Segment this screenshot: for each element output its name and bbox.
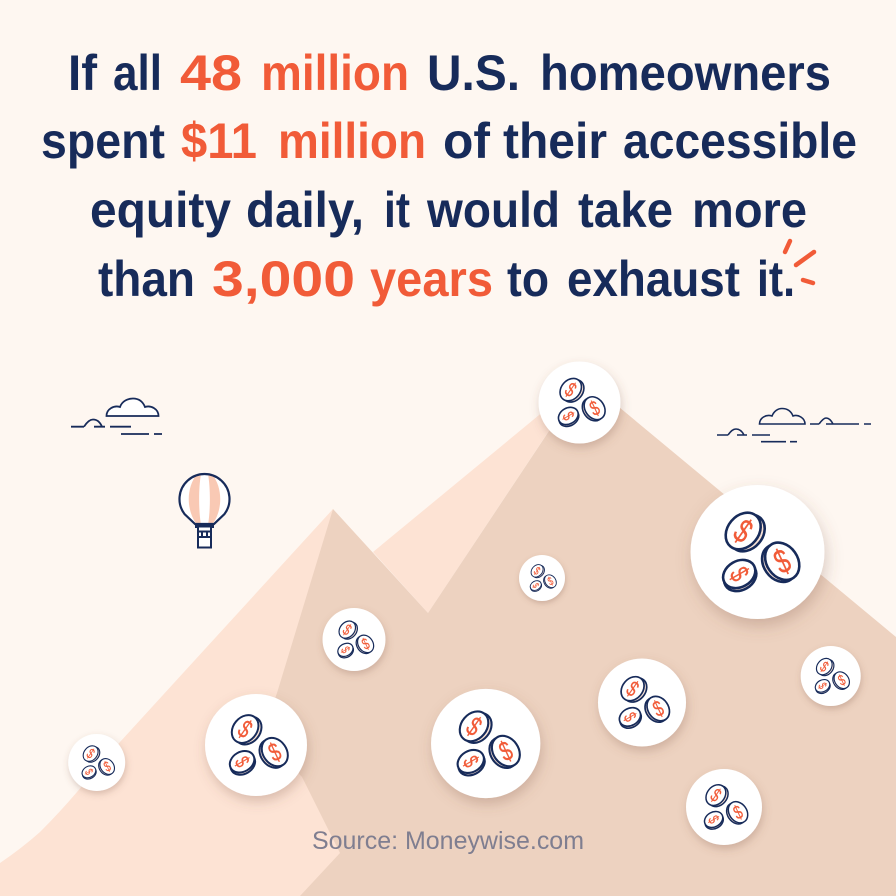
coins badge: far left: $ [101,758,113,775]
coins badge: middle right: $ [619,709,640,726]
coins badge: far left [68,734,125,791]
coins badge: left facet [323,608,385,671]
title: would [426,182,560,238]
mountains [0,378,896,896]
coins badge: far left: $ [83,746,97,762]
title: it. [757,251,795,307]
coins badge: lower right: $ [705,812,723,827]
coins badge: small center: $ [531,565,542,578]
coins badge: left large [205,694,307,796]
title: daily, [246,182,364,238]
title: U.S. [427,45,520,101]
coins badge: lower center: $ [495,735,518,768]
title: If [68,45,97,101]
title: take [578,182,673,238]
title: 3,000 [212,251,355,307]
title: exhaust [567,251,740,307]
title: to [507,251,549,307]
title: homeowners [540,45,831,101]
coins badge: left facet: $ [340,620,356,639]
coins badge: small center [519,555,565,601]
coins badge: lower center: $ [457,752,483,772]
coins badge: left large: $ [233,714,258,744]
coins badge: large right [690,485,824,619]
coins badge: top peak: $ [561,378,581,402]
coins badge: far left: $ [81,767,95,778]
coins badge: small center: $ [530,581,541,590]
title: more [692,182,807,238]
title: than [98,251,195,307]
coins badge: far right: $ [835,671,849,689]
coins badge: far right: $ [817,658,832,676]
coins badge: left large: $ [264,737,286,767]
title: $11 [181,113,257,169]
coins badge: large right: $ [726,512,759,551]
coins badge: small center: $ [546,575,556,589]
coins badge: large right: $ [724,562,755,586]
source credit: Source: Moneywise.com [312,827,584,855]
title: years [370,251,493,307]
title: 48 [180,45,242,101]
coins badge: far right: $ [815,681,829,692]
coins badge: left facet: $ [337,645,352,656]
coins badge: lower right [686,769,762,845]
title: million [278,113,426,169]
title: it [384,182,410,238]
title: spent [41,113,165,169]
title: equity [90,182,231,238]
title: all [113,45,162,101]
coins badge: lower center [431,689,540,798]
coins badge: top peak: $ [558,409,577,424]
coins badge: lower center: $ [460,711,487,743]
icon: sparkle accent [785,241,814,283]
coins badge: left large: $ [230,752,254,771]
icon: right clouds [717,408,871,442]
title: accessible [623,113,857,169]
title: million [261,45,409,101]
coins badge: far right [801,646,861,706]
title: their [503,113,607,169]
title: of [443,113,490,169]
coins badge: middle right: $ [649,696,668,723]
coins badge: large right: $ [768,542,797,582]
icon: left clouds [71,398,162,434]
coins badge: lower right: $ [730,801,747,824]
title [41,45,857,307]
coins badge: top peak: $ [586,396,603,420]
coins badge: middle right [598,658,686,747]
coins badge: middle right: $ [621,676,643,702]
coins badge: top peak [538,361,621,444]
coins badge: lower right: $ [706,784,726,807]
icon: hot air balloon [175,474,234,548]
coins badge: left facet: $ [359,634,372,653]
